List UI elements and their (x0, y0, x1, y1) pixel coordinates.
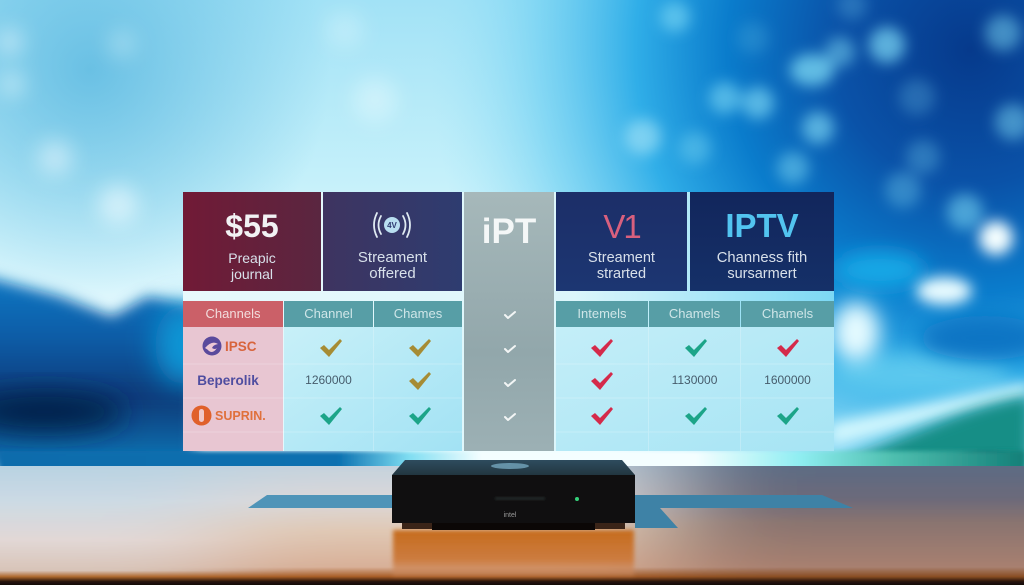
brand: IPSC: IPSC (225, 339, 257, 354)
IPTV caption: Channess fith (717, 250, 807, 266)
stream caption: offered (369, 265, 416, 282)
brand: Beperolik: Beperolik (197, 373, 259, 388)
wooden table top (0, 465, 1024, 585)
panel: right table (556, 327, 834, 451)
table backing (183, 192, 834, 451)
header: Channel (284, 301, 373, 327)
left mountain (0, 272, 215, 470)
panel: center iPT column (464, 192, 554, 451)
value: 1130000: 1130000 (672, 373, 717, 387)
brand: SUPRIN (192, 406, 266, 426)
white highlight light (979, 221, 1013, 255)
value: 1600000: 1600000 (764, 373, 811, 387)
right sky patches and hill (820, 252, 1024, 474)
IPTV caption (717, 250, 807, 282)
brand: SUPRIN: SUPRIN. (215, 409, 266, 423)
stream caption: Streament (358, 249, 427, 266)
value: 1260000: 1260000 (305, 373, 352, 387)
header: Chames (374, 301, 462, 327)
header: Channel: Channel (304, 306, 353, 321)
price caption (228, 250, 276, 282)
set-top box: intel (504, 512, 517, 519)
V1 caption (588, 250, 655, 282)
icon: broadcast signal (373, 212, 411, 238)
header: Chamels B: Chamels (762, 306, 813, 321)
header: Internels (556, 301, 648, 327)
right table body (556, 327, 834, 451)
header: Chamels B (741, 301, 834, 327)
V1 figure: V1 (603, 208, 640, 245)
center checks (504, 311, 516, 421)
header: Chamels A (649, 301, 740, 327)
IPTV caption: sursarmert (727, 266, 797, 282)
panel: price card (183, 192, 321, 291)
header: Chamels A: Chamels (669, 306, 720, 321)
price caption: journal (231, 266, 273, 282)
header: Channels (183, 301, 283, 327)
icon: broadcast signal: 4V (387, 221, 398, 230)
set-top box shadow on table (248, 495, 392, 508)
panel: V1 card (556, 192, 687, 291)
price caption: Preapic (228, 250, 276, 266)
header: Internels: Intemels (577, 306, 627, 321)
panel: stream offered card (323, 192, 462, 291)
V1 caption: strarted (597, 266, 646, 282)
panel: left table (183, 327, 462, 451)
price figure: $55 (225, 208, 279, 244)
panel: IPTV card (690, 192, 834, 291)
table body (183, 327, 462, 451)
brand: IPSC (202, 336, 257, 356)
bokeh lights (625, 0, 1024, 230)
V1 caption: Streament (588, 250, 655, 266)
orange reflection of box (393, 530, 634, 576)
IPTV figure: IPTV (725, 207, 799, 244)
header: Chames: Chames (394, 306, 442, 321)
set-top box (392, 460, 635, 530)
stream caption (358, 249, 427, 282)
center heading: iPT (482, 212, 536, 251)
horizon strip (0, 451, 1024, 471)
header: Channels: Channels (206, 306, 260, 321)
